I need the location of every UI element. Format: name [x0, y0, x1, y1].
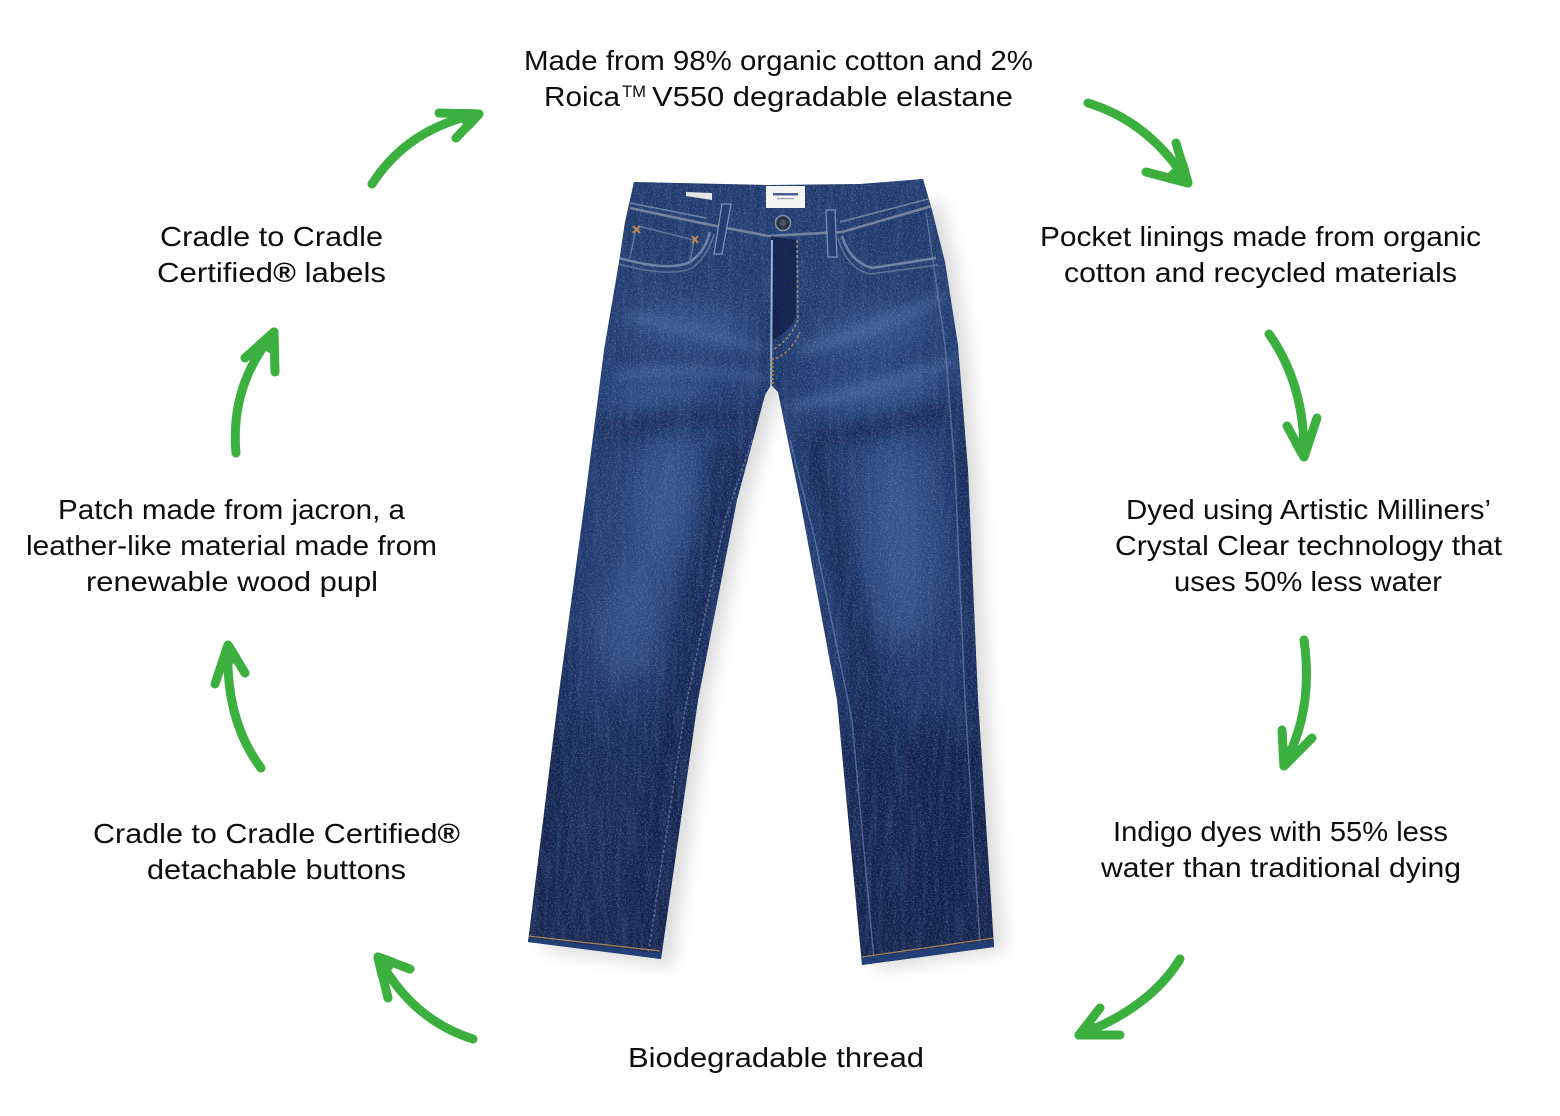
text: top: Made from 98% organic cotton and 2% — [524, 45, 1033, 76]
arrow: bottom left — [378, 957, 473, 1039]
text: top: V550 degradable elastane — [652, 81, 1013, 112]
arrow: left lower — [215, 645, 261, 768]
text: buttons: detachable buttons — [147, 854, 406, 885]
text: top: Roica — [544, 81, 620, 112]
denim body — [520, 175, 1000, 970]
waistband — [628, 179, 930, 208]
waistband stitching — [630, 206, 932, 236]
text: indigo — [1100, 816, 1461, 883]
hems — [528, 938, 661, 960]
text: dye: Dyed using Artistic Milliners’ — [1126, 494, 1491, 525]
text: dye: Crystal Clear technology that — [1115, 530, 1502, 561]
rivets — [633, 226, 698, 243]
text: pocket linings: cotton and recycled materials — [1064, 257, 1457, 288]
text: patch: renewable wood pupl — [86, 566, 378, 597]
vertical fibres — [520, 175, 1000, 970]
text: patch: leather-like material made from — [26, 530, 437, 561]
inner leg shade — [662, 390, 768, 954]
text: top: TM — [622, 82, 646, 101]
arrow: right upper — [1269, 334, 1317, 457]
text: buttons — [93, 818, 460, 885]
pockets — [619, 232, 710, 266]
coin pocket — [630, 226, 694, 262]
text: labels: Cradle to Cradle — [160, 221, 383, 252]
dark creases — [530, 300, 1000, 960]
text: patch — [26, 494, 437, 597]
text: dye: uses 50% less water — [1174, 566, 1442, 597]
text: indigo: water than traditional dying — [1100, 852, 1461, 883]
arrow: left upper — [235, 332, 275, 453]
outer seam — [926, 212, 980, 945]
brand label — [766, 186, 805, 208]
text: thread: Biodegradable thread — [628, 1042, 924, 1073]
text: pocket linings: Pocket linings made from organic — [1040, 221, 1481, 252]
arrow: top right — [1088, 103, 1188, 183]
arrow: top left — [372, 113, 479, 184]
inner seams — [648, 440, 752, 955]
text: buttons: Cradle to Cradle Certified ® — [93, 818, 460, 849]
jeans shadow — [545, 200, 1004, 970]
text: top — [524, 45, 1033, 112]
jeans photo — [520, 175, 1004, 970]
text: indigo: Indigo dyes with 55% less — [1113, 816, 1448, 847]
text: labels: Certified ® labels — [157, 257, 386, 288]
fly placket — [771, 236, 797, 340]
denim texture — [520, 175, 1000, 970]
text: labels — [157, 221, 386, 288]
arrow: right lower — [1282, 640, 1312, 766]
light wash patches — [591, 298, 941, 689]
text: dye — [1115, 494, 1502, 597]
belt loops — [714, 204, 731, 254]
text: pocket linings — [1040, 221, 1481, 288]
waist inner label — [686, 192, 712, 200]
arrow: bottom right — [1079, 959, 1180, 1035]
text: patch: Patch made from jacron, a — [58, 494, 405, 525]
button — [776, 216, 790, 230]
whiskers — [615, 290, 957, 412]
